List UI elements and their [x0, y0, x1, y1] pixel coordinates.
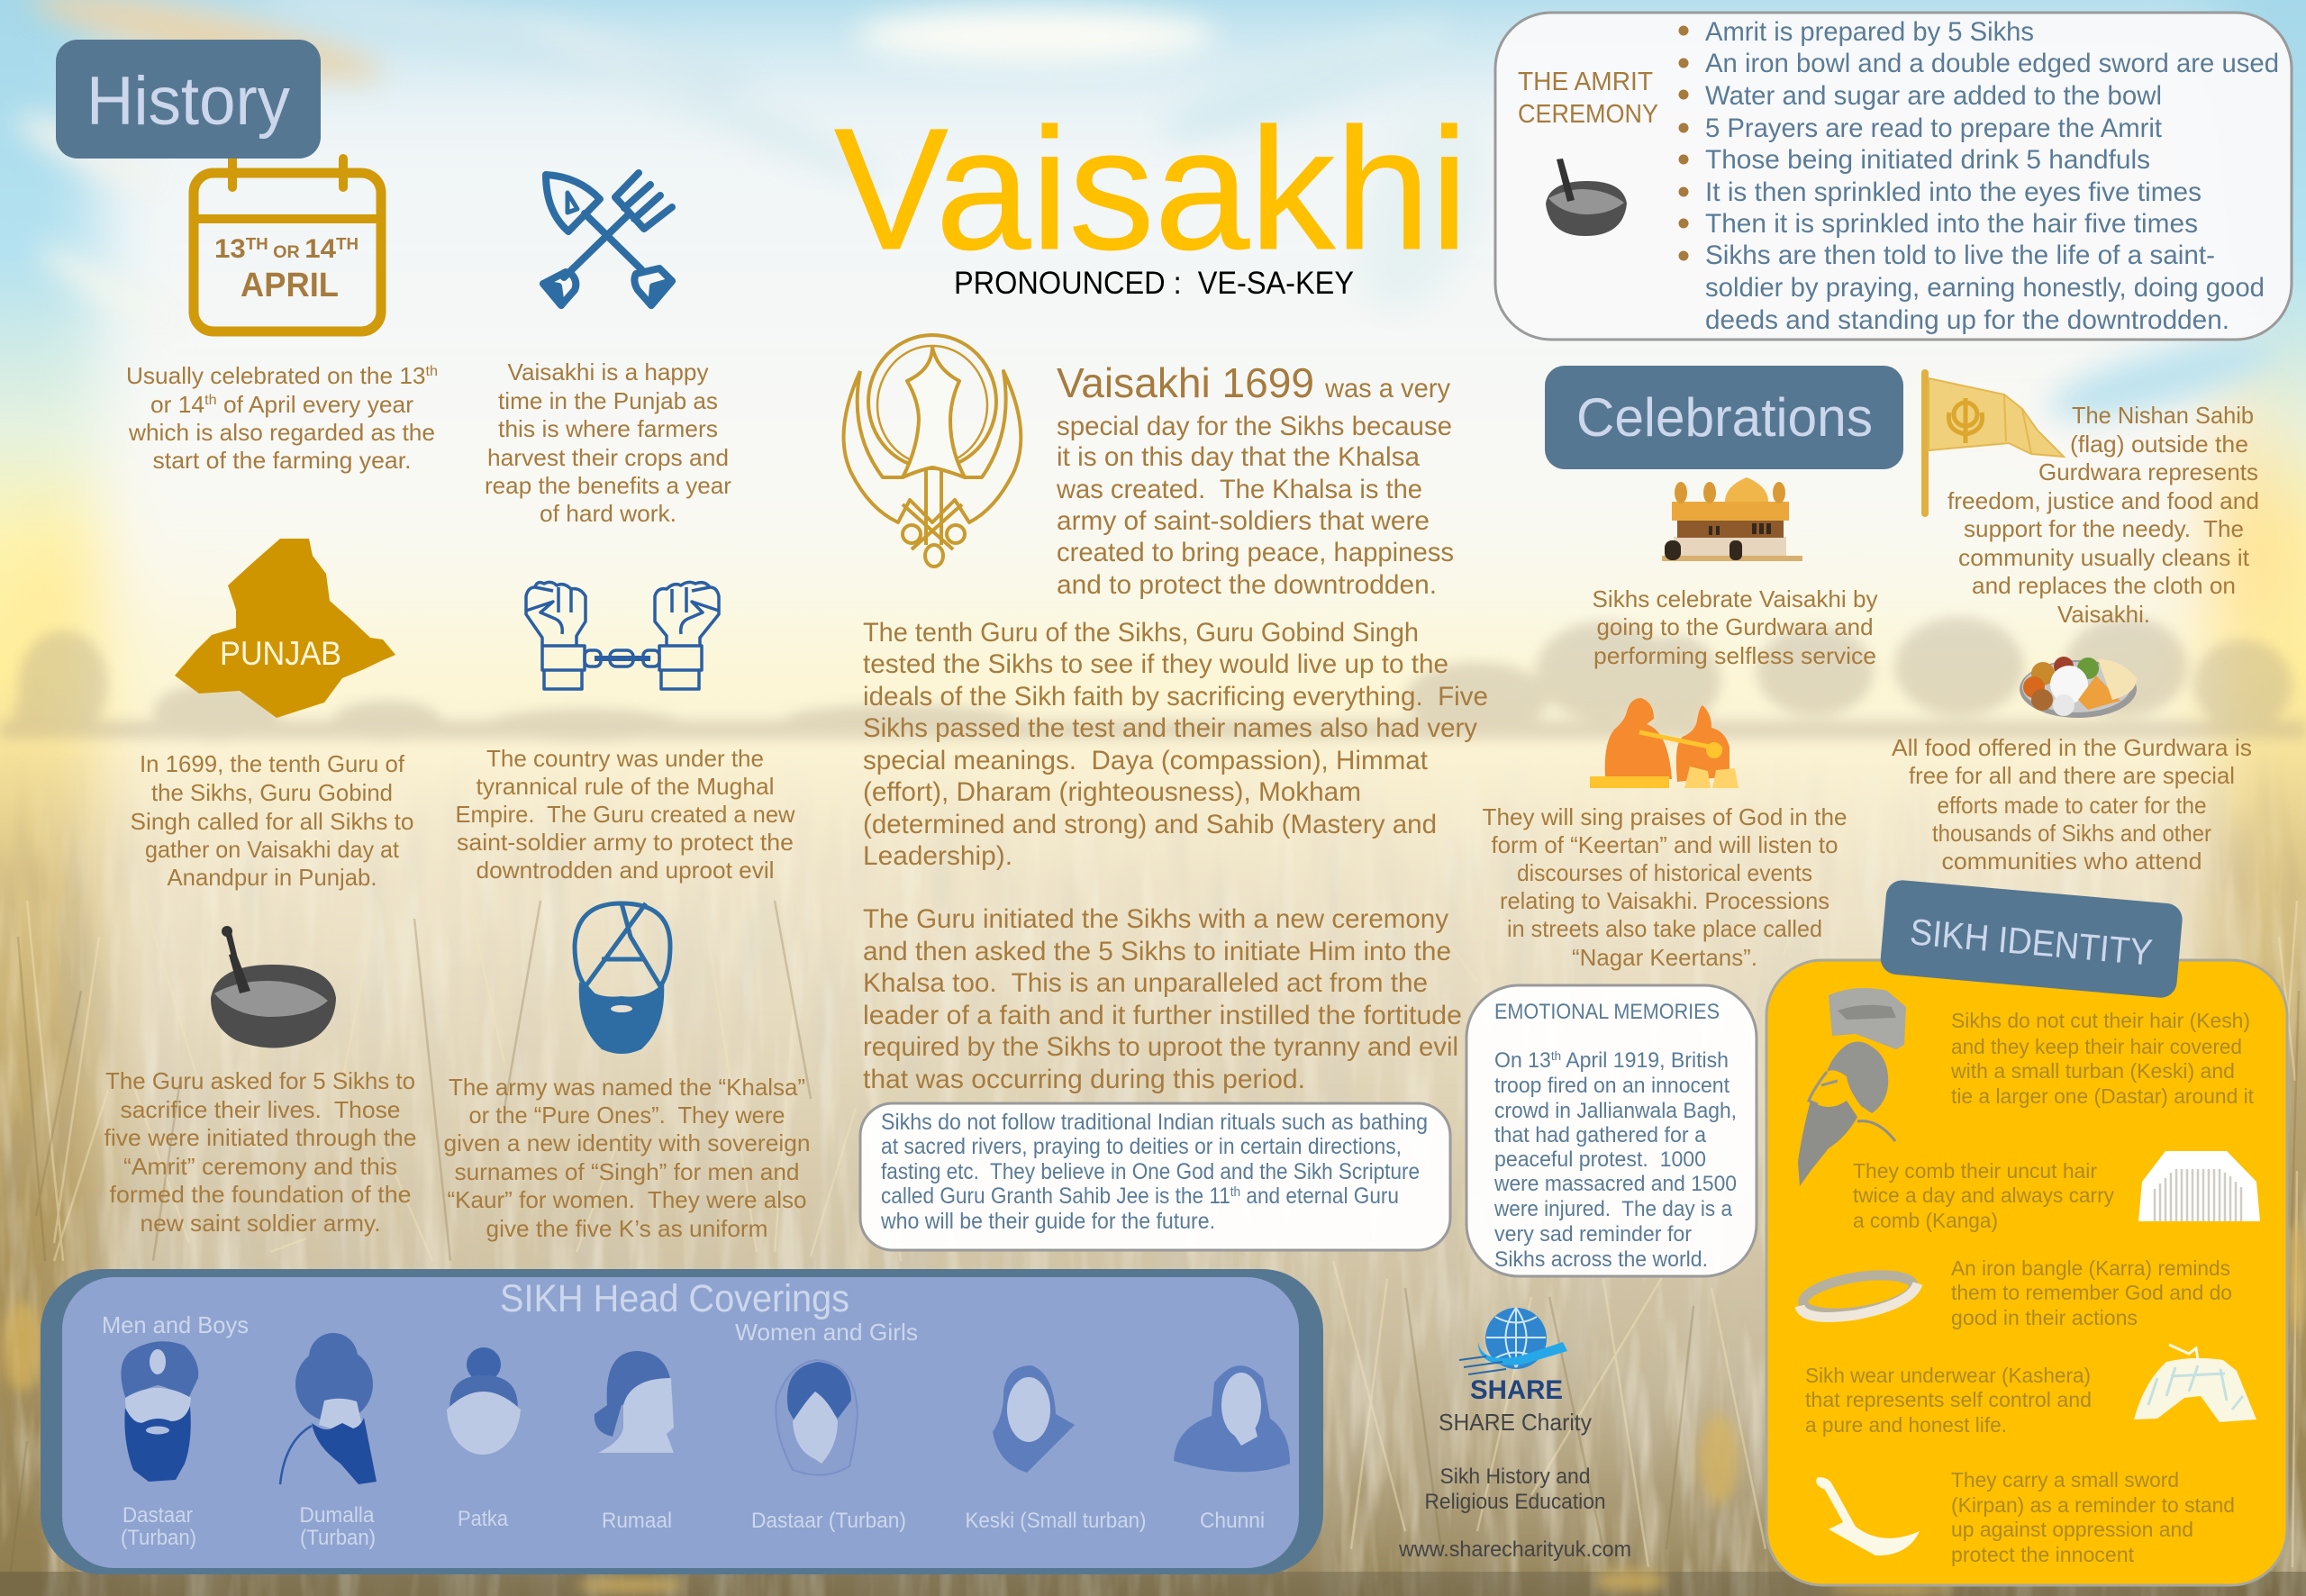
panel: Sikh Head Coverings: SIKH Head Coverings [500, 1277, 849, 1320]
icon: Amrit bowl small [1546, 159, 1627, 236]
icon: Nishan Sahib flag [1921, 369, 2064, 517]
labels: head covering names [121, 1503, 1265, 1550]
bullet list: It is then sprinkled into the eyes five times [1705, 177, 2202, 207]
callout: Sikh beliefs: fasting etc. They believe in One God and the Sikh Scripture [881, 1159, 1420, 1184]
text: Nishan Sahib: support for the needy. The [1964, 515, 2244, 542]
text: Vaisakhi 1699: and to protect the downtrodden. [1057, 570, 1437, 600]
text: SHARE charity details: www.sharecharityuk.com [1398, 1537, 1631, 1562]
text: Kirpan: (Kirpan) as a reminder to stand [1951, 1493, 2235, 1517]
text: Kashera [1805, 1364, 2092, 1437]
text: SHARE charity details: SHARE Charity [1439, 1409, 1592, 1436]
icon: Keertan musicians [1590, 698, 1739, 788]
text: Kesh: Sikhs do not cut their hair (Kesh) [1951, 1009, 2250, 1032]
panel: The Amrit Ceremony: CEREMONY [1518, 100, 1658, 129]
text: date explanation: of April every year [217, 391, 413, 418]
callout: Sikh beliefs: who will be their guide for the future. [880, 1209, 1215, 1234]
icon: Kashera [2134, 1345, 2256, 1422]
panel: Emotional Memories: troop fired on an innocent [1494, 1074, 1730, 1098]
text: Keertan: relating to Vaisakhi. Processions [1500, 887, 1829, 914]
text: Karra [1951, 1256, 2232, 1329]
text: Vaisakhi 1699: was a very [1324, 374, 1450, 404]
heading: Sikh Identity: SIKH IDENTITY [1908, 911, 2154, 974]
text: Nishan Sahib: community usually cleans it [1958, 544, 2250, 571]
text: initiation paragraph [863, 904, 1462, 1094]
text: Mughal rule: The country was under the [486, 745, 764, 772]
text: Khalsa identity: give the five K’s as uniform [486, 1215, 767, 1242]
labels: head covering names: Keski (Small turban) [966, 1509, 1146, 1533]
callout: Sikh beliefs: called Guru Granth Sahib Jee is the 11 [881, 1183, 1267, 1209]
icon: Punjab map [175, 539, 395, 718]
labels: head covering names: (Turban) [300, 1526, 376, 1550]
text: tenth Guru paragraph: ideals of the Sikh faith by sacrificing everything. Five [863, 682, 1488, 712]
bullet list: Water and sugar are added to the bowl [1705, 81, 2162, 111]
labels: head covering names: Dumalla [299, 1503, 375, 1528]
background: wheat stalks [9, 901, 2299, 1585]
bullet list: Amrit is prepared by 5 Sikhs [1705, 17, 2034, 47]
icon: SHARE logo [1459, 1308, 1567, 1405]
text: Karra: good in their actions [1951, 1306, 2138, 1329]
panel: History heading [56, 40, 321, 159]
panel: Emotional Memories: crowd in Jallianwala Bagh, [1494, 1099, 1737, 1123]
text: Mughal rule: tyrannical rule of the Mughal [476, 773, 775, 800]
panel: Emotional Memories: were massacred and 1500 [1493, 1172, 1737, 1196]
panel: Emotional Memories: On 13 [1494, 1048, 1553, 1073]
text: free food [1892, 734, 2252, 875]
icon: food thali [2020, 657, 2137, 718]
text: going to Gurdwara: Sikhs celebrate Vaisakhi by [1593, 585, 1877, 612]
panel: Celebrations heading: Celebrations [1576, 387, 1873, 448]
text: Guru called Sikhs: In 1699, the tenth Guru of [140, 750, 405, 777]
text: Nishan Sahib: Vaisakhi. [2057, 601, 2150, 628]
icon: calendar: 14 [304, 234, 335, 264]
panel: Emotional Memories: April 1919, British [1561, 1048, 1729, 1073]
text: Khalsa identity: or the “Pure Ones”. They were [468, 1102, 785, 1129]
labels: head covering names: Patka [458, 1507, 509, 1531]
text: Nishan Sahib: freedom, justice and food and [1947, 487, 2259, 514]
text: Kirpan: up against oppression and [1951, 1518, 2193, 1541]
text: date explanation: start of the farming year. [153, 447, 411, 474]
text: date explanation: Usually celebrated on the 13 [126, 362, 423, 389]
text: initiation paragraph: leader of a faith and it further instilled the fortitude [863, 1001, 1462, 1030]
icon: calendar [194, 159, 381, 331]
labels: head covering names: Rumaal [602, 1509, 672, 1533]
text: Vaisakhi 1699: Vaisakhi 1699 [1057, 359, 1314, 406]
icon: calendar: TH [246, 235, 268, 253]
icon: calendar: 13 [214, 234, 244, 264]
text: free food: efforts made to cater for the [1937, 792, 2207, 819]
panel: Sikh Head Coverings: Women and Girls [735, 1319, 918, 1346]
text: free food: free for all and there are special [1909, 762, 2235, 789]
pronunciation: PRONOUNCED : VE-SA-KEY [954, 266, 1354, 301]
labels: head covering names: Dastaar (Turban) [751, 1509, 906, 1533]
heading: Sikh Identity [1879, 879, 2183, 999]
text: Khalsa identity: The army was named the “Khalsa” [449, 1074, 805, 1101]
text: going to Gurdwara [1593, 585, 1877, 669]
text: farmers: harvest their crops and [487, 444, 729, 471]
text: farmers: of hard work. [540, 500, 676, 527]
panel: Celebrations heading [1545, 366, 1903, 469]
text: Guru called Sikhs: Anandpur in Punjab. [168, 864, 377, 891]
text: going to Gurdwara: performing selfless service [1593, 642, 1876, 669]
text: Vaisakhi 1699: created to bring peace, happiness [1057, 538, 1454, 567]
labels: head covering names: (Turban) [121, 1526, 196, 1550]
text: Kirpan: They carry a small sword [1951, 1468, 2179, 1492]
bullet list: Those being initiated drink 5 handfuls [1705, 145, 2150, 175]
bullet list: Sikhs are then told to live the life of a saint- [1705, 240, 2215, 270]
panel: Sikh Head Coverings: Men and Boys [102, 1311, 249, 1338]
panel: Emotional Memories: that had gathered for a [1494, 1123, 1707, 1147]
text: date explanation: th [426, 364, 438, 379]
text: tenth Guru paragraph: special meanings. Daya (compassion), Himmat [863, 746, 1429, 775]
text: going to Gurdwara: going to the Gurdwara and [1596, 613, 1874, 640]
bullet list: soldier by praying, earning honestly, doing good [1705, 273, 2265, 303]
text: Nishan Sahib: The Nishan Sahib [2072, 402, 2254, 429]
text: Khalsa identity: given a new identity with sovereign [443, 1129, 811, 1156]
text: Kesh: and they keep their hair covered [1951, 1035, 2242, 1058]
text: five Sikhs sacrifice: new saint soldier army. [141, 1210, 380, 1237]
icon: Sikh man profile [1798, 988, 1906, 1186]
text: Vaisakhi 1699: special day for the Sikhs because [1057, 412, 1452, 441]
text: Vaisakhi 1699: it is on this day that the Khalsa [1057, 442, 1420, 472]
text: Kesh [1950, 1009, 2255, 1108]
text: farmers: Vaisakhi is a happy [508, 358, 708, 385]
text: Nishan Sahib: Gurdwara represents [2038, 458, 2258, 485]
text: initiation paragraph: that was occurring during this period. [863, 1065, 1305, 1094]
icon: Amrit bowl large [211, 926, 336, 1048]
icon: Punjab map: PUNJAB [220, 635, 341, 672]
icon: Khanda [844, 335, 1021, 567]
icon: Keski [993, 1365, 1075, 1473]
bullet list: deeds and standing up for the downtrodden. [1705, 305, 2229, 335]
callout: Sikh beliefs [860, 1103, 1450, 1250]
text: Guru called Sikhs: Singh called for all Sikhs to [130, 808, 414, 835]
icon: Gurdwara [1662, 477, 1802, 561]
text: Kesh: with a small turban (Keski) and [1950, 1059, 2235, 1083]
panel: Emotional Memories: were injured. The day is a [1493, 1197, 1733, 1221]
text: Khalsa identity: “Kaur” for women. They were also [447, 1186, 807, 1213]
icon: Patka [447, 1347, 521, 1455]
text: Vaisakhi 1699: army of saint-soldiers that were [1057, 506, 1430, 536]
text: tenth Guru paragraph: tested the Sikhs to see if they would live up to the [863, 649, 1448, 679]
icon: comb [2138, 1151, 2260, 1221]
text: Keertan: “Nagar Keertans”. [1572, 944, 1757, 971]
text: Karra: them to remember God and do [1951, 1281, 2232, 1304]
icon: calendar: APRIL [241, 267, 339, 304]
icon: chained fists [526, 582, 719, 689]
text: SHARE charity details: Religious Education [1425, 1490, 1605, 1514]
text: Vaisakhi 1699: was created. The Khalsa is the [1056, 475, 1422, 504]
callout: Sikh beliefs: th [1230, 1184, 1240, 1200]
text: five Sikhs sacrifice [104, 1067, 416, 1237]
icon: Kirpan [1816, 1477, 1920, 1555]
text: Kashera: Sikh wear underwear (Kashera) [1805, 1364, 2091, 1387]
callout: Sikh beliefs: and eternal Guru [1240, 1183, 1399, 1209]
panel: Sikh Head Coverings [41, 1269, 1323, 1574]
icon: Dastaar woman [776, 1360, 858, 1475]
labels: head covering names: Dastaar [123, 1503, 193, 1528]
text: five Sikhs sacrifice: formed the foundation of the [110, 1181, 411, 1208]
text: Nishan Sahib: and replaces the cloth on [1972, 572, 2236, 599]
panel: Emotional Memories: Sikhs across the world. [1494, 1247, 1708, 1272]
labels: head covering names: Chunni [1200, 1509, 1265, 1533]
text: Mughal rule [456, 745, 795, 884]
background: clouds [10, 0, 2282, 435]
text: Kirpan: protect the innocent [1951, 1543, 2135, 1566]
text: farmers: reap the benefits a year [485, 472, 731, 499]
text: Kanga [1853, 1159, 2114, 1232]
icon: Karra bangle [1800, 1269, 1918, 1319]
icon: Dumalla [280, 1333, 377, 1484]
text: tenth Guru paragraph: Sikhs passed the test and their names also had very [863, 713, 1477, 743]
text: free food: communities who attend [1942, 848, 2202, 875]
text: Vaisakhi 1699 [1056, 359, 1454, 600]
text: date explanation: which is also regarded as the [128, 419, 435, 446]
text: date explanation: th [204, 393, 217, 408]
text: Keertan: They will sing praises of God in the [1483, 803, 1847, 830]
text: Guru called Sikhs [130, 750, 414, 891]
text: initiation paragraph: required by the Sikhs to uproot the tyranny and evil [863, 1032, 1458, 1062]
bullet list [1679, 17, 2279, 335]
icon: Rumaal [595, 1351, 674, 1453]
text: Kanga: a comb (Kanga) [1853, 1209, 1998, 1232]
text: Kanga: twice a day and always carry [1853, 1183, 2114, 1207]
icon: Chunni [1174, 1365, 1290, 1472]
background: tree line [0, 617, 2306, 741]
text: initiation paragraph: and then asked the 5 Sikhs to initiate Him into the [863, 937, 1451, 966]
text: Keertan: in streets also take place called [1507, 915, 1822, 942]
text: Mughal rule: Empire. The Guru created a new [456, 801, 795, 828]
text: Guru called Sikhs: gather on Vaisakhi day at [145, 836, 400, 863]
text: Keertan: discourses of historical events [1517, 859, 1812, 886]
text: Khalsa identity [443, 1074, 811, 1242]
text: free food: thousands of Sikhs and other [1932, 820, 2211, 847]
icon: SHARE logo: SHARE [1470, 1375, 1563, 1405]
icon: Dastaar man [121, 1341, 198, 1482]
text: five Sikhs sacrifice: sacrifice their lives. Those [121, 1096, 400, 1123]
text: initiation paragraph: Khalsa too. This is an unparalleled act from the [863, 968, 1428, 998]
text: five Sikhs sacrifice: The Guru asked for 5 Sikhs to [105, 1067, 415, 1094]
text: five Sikhs sacrifice: “Amrit” ceremony and this [123, 1153, 397, 1180]
text: tenth Guru paragraph: The tenth Guru of the Sikhs, Guru Gobind Singh [863, 618, 1419, 648]
callout: Sikh beliefs: at sacred rivers, praying to deities or in certain directions, [881, 1134, 1402, 1159]
text: SHARE charity details: Sikh History and [1439, 1465, 1591, 1489]
text: tenth Guru paragraph: (effort), Dharam (righteousness), Mokham [863, 777, 1361, 807]
text: Nishan Sahib: (flag) outside the [2070, 431, 2248, 458]
title: Vaisakhi [834, 92, 1468, 286]
bullet list: Then it is sprinkled into the hair five times [1705, 209, 2198, 239]
text: Guru called Sikhs: the Sikhs, Guru Gobind [151, 779, 393, 806]
text: Kashera: that represents self control and [1805, 1388, 2092, 1411]
text: Kirpan [1951, 1468, 2235, 1566]
text: Kesh: tie a larger one (Dastar) around it [1951, 1084, 2255, 1108]
text: farmers: this is where farmers [498, 415, 718, 442]
icon: crossed farming tools [543, 173, 672, 305]
text: Mughal rule: downtrodden and uproot evil [476, 857, 775, 884]
panel: Sikh Identity [1766, 879, 2287, 1585]
text: Mughal rule: saint-soldier army to protect the [457, 829, 794, 856]
text: SHARE charity details [1398, 1409, 1631, 1562]
text: Keertan: form of “Keertan” and will listen to [1492, 831, 1838, 858]
panel: Emotional Memories: very sad reminder for [1494, 1222, 1692, 1247]
icon: calendar: OR [268, 243, 304, 262]
text: tenth Guru paragraph: Leadership). [863, 841, 1012, 871]
text: Keertan [1483, 803, 1847, 971]
icon: Khalsa head [575, 903, 670, 1054]
icon: calendar: TH [336, 235, 359, 253]
text: Kashera: a pure and honest life. [1805, 1413, 2007, 1437]
text: date explanation [126, 362, 438, 474]
panel: Emotional Memories: peaceful protest. 1000 [1494, 1147, 1706, 1172]
text: tenth Guru paragraph: (determined and strong) and Sahib (Mastery and [863, 810, 1437, 839]
callout: Sikh beliefs: Sikhs do not follow traditional Indian rituals such as bathing [881, 1110, 1428, 1135]
panel: History heading: History [86, 63, 290, 140]
text: Kanga: They comb their uncut hair [1853, 1159, 2097, 1183]
text: farmers: time in the Punjab as [498, 387, 718, 414]
text: farmers [485, 358, 731, 527]
text: Khalsa identity: surnames of “Singh” for men and [454, 1158, 800, 1185]
text: Karra: An iron bangle (Karra) reminds [1951, 1256, 2230, 1280]
text: initiation paragraph: The Guru initiated the Sikhs with a new ceremony [863, 904, 1448, 934]
text: date explanation: or 14 [150, 391, 204, 418]
panel: The Amrit Ceremony: THE AMRIT [1518, 68, 1653, 96]
bullet list: 5 Prayers are read to prepare the Amrit [1705, 113, 2163, 143]
panel: Emotional Memories: th [1551, 1048, 1561, 1063]
panel: Emotional Memories [1466, 985, 1757, 1276]
text: free food: All food offered in the Gurdwara is [1892, 734, 2252, 761]
bullet list: An iron bowl and a double edged sword are used [1705, 49, 2279, 78]
text: five Sikhs sacrifice: five were initiated through the [104, 1124, 416, 1151]
text: Nishan Sahib [1947, 402, 2259, 628]
panel: The Amrit Ceremony [1495, 13, 2292, 340]
panel: Emotional Memories: EMOTIONAL MEMORIES [1494, 1000, 1720, 1024]
text: tenth Guru paragraph [863, 618, 1488, 871]
